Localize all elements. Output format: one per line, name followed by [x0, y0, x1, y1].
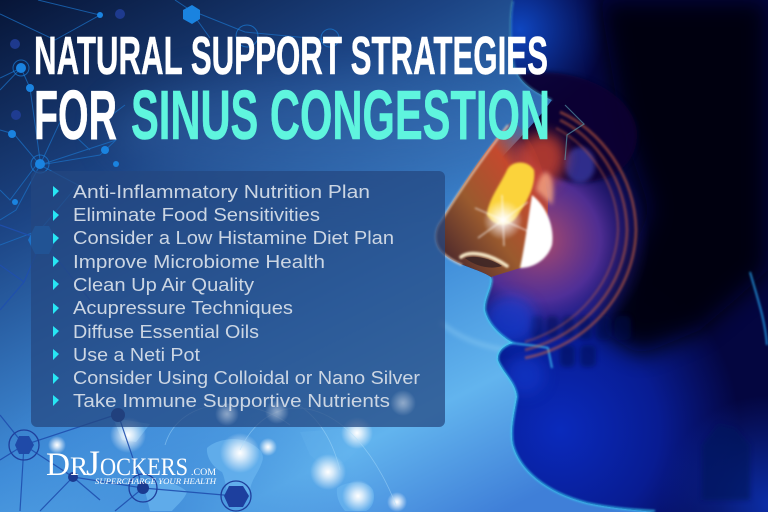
- side profile of head: [430, 0, 768, 512]
- blurred city glows behind text: [215, 390, 416, 426]
- logo: DrJockers.com: OCKERS: [100, 454, 188, 481]
- logo: DrJockers.com: .COM: [191, 468, 217, 478]
- neck cartilage shape: [702, 424, 750, 500]
- orange rings: [525, 112, 636, 358]
- list text: Diffuse Essential Oils: [73, 322, 259, 342]
- logo: DrJockers.com: J: [86, 443, 100, 483]
- glowing face outline: [485, 277, 655, 511]
- nose bright edge: [436, 125, 508, 265]
- list text: Consider a Low Histamine Diet Plan: [73, 228, 394, 248]
- list text: Consider Using Colloidal or Nano Silver: [73, 368, 420, 388]
- sinus red area: [517, 133, 566, 191]
- triangular sinus outline: [565, 105, 584, 160]
- lens flare: [475, 195, 530, 246]
- nose body: [436, 120, 548, 277]
- eye socket: [512, 72, 637, 182]
- teeth: [530, 316, 631, 367]
- network nodes, lower left: [0, 225, 251, 511]
- logo: DrJockers.com: D: [46, 447, 70, 483]
- nostril: [461, 254, 507, 266]
- lip bright blue: [484, 296, 536, 344]
- list text: Improve Microbiome Health: [73, 252, 325, 272]
- list text: [73, 182, 420, 411]
- peach passage: [536, 172, 553, 205]
- title: [34, 27, 550, 154]
- list text: Acupressure Techniques: [73, 298, 293, 318]
- jaw and neck glow line: [750, 272, 767, 345]
- title backdrop glow: [110, 75, 550, 185]
- cheek tint: [477, 145, 646, 333]
- list text: Use a Neti Pot: [73, 345, 200, 365]
- white nasal cavity: [520, 195, 553, 268]
- list text: Eliminate Food Sensitivities: [73, 205, 320, 225]
- logo: DrJockers.com: [46, 443, 217, 486]
- bullet arrows: [53, 186, 59, 406]
- lower background glow: [0, 322, 360, 512]
- logo: DrJockers.com: R: [70, 452, 89, 481]
- list text: Take Immune Supportive Nutrients: [73, 391, 390, 411]
- eye: [565, 147, 595, 183]
- title: FOR: [34, 76, 117, 154]
- logo: DrJockers.com: SUPERCHARGE YOUR HEALTH: [95, 476, 217, 486]
- pale halo ring over background: [440, 322, 525, 352]
- mouth glow: [513, 343, 552, 368]
- yellow sinus blob: [487, 162, 534, 225]
- list text: Anti-Inflammatory Nutrition Plan: [73, 182, 370, 202]
- network nodes and links, top and left: [0, 0, 339, 245]
- world map with glowing cities: [48, 400, 407, 512]
- head silhouette with shading: [430, 0, 768, 512]
- list text: Clean Up Air Quality: [73, 275, 254, 295]
- panel: strategies list: [31, 171, 445, 427]
